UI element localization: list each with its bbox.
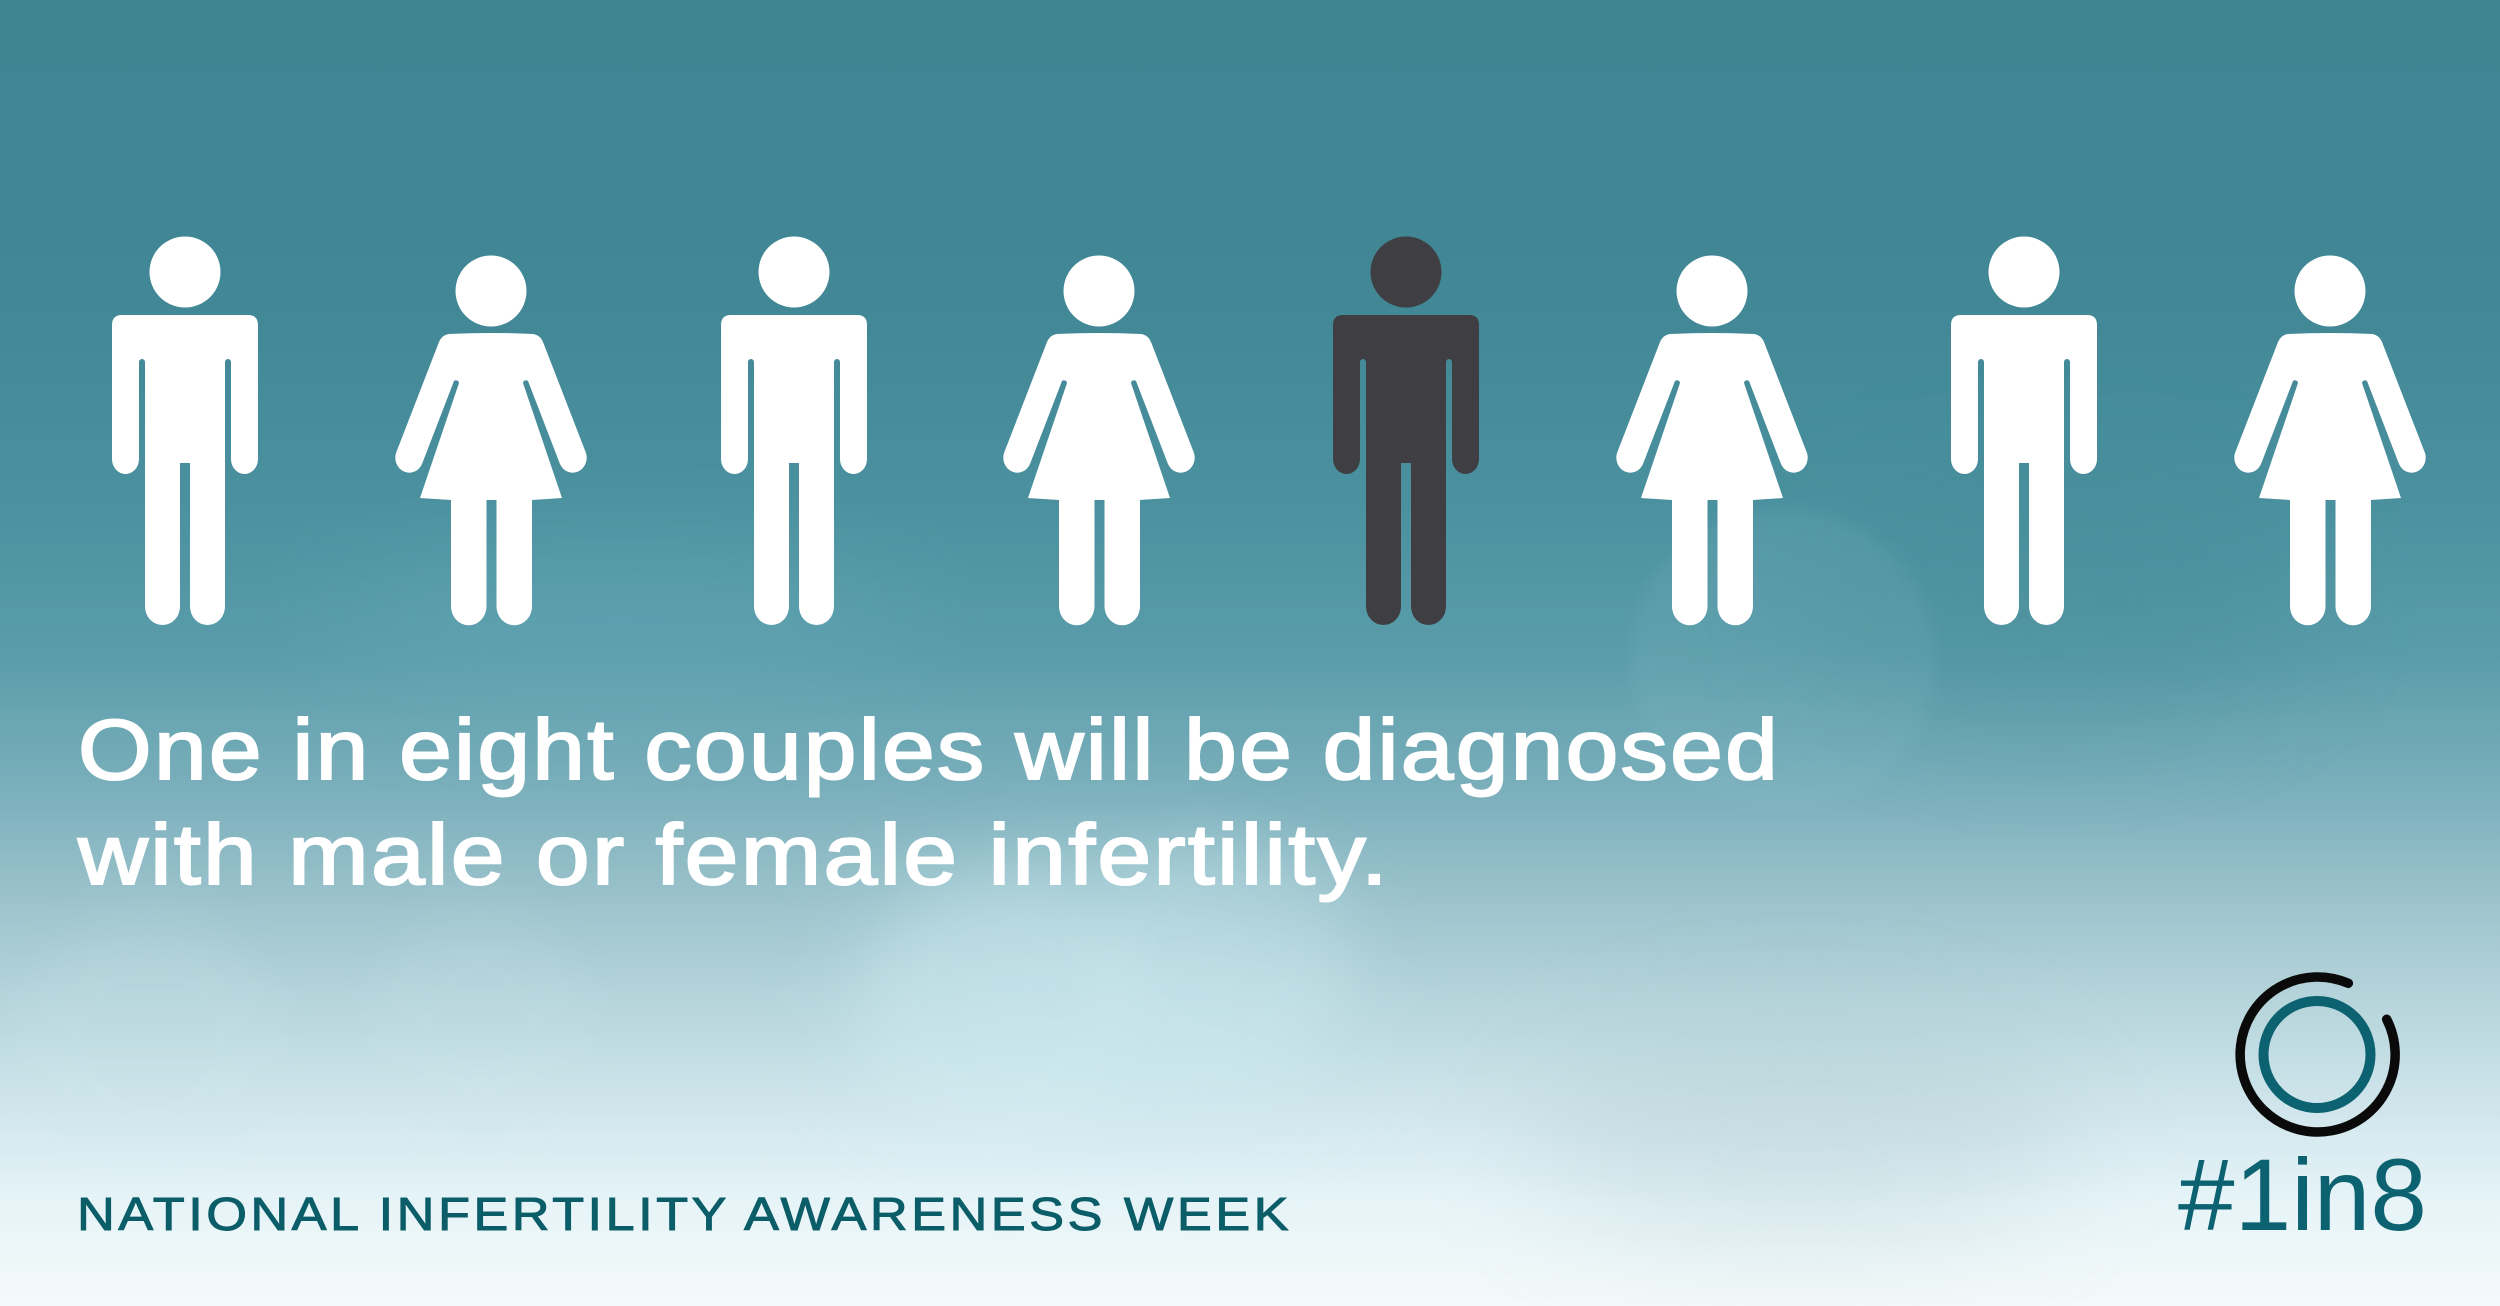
headline — [77, 703, 1780, 903]
icon: man 4 — [1951, 236, 2097, 625]
person row — [112, 236, 2426, 625]
icon: man 2 — [721, 236, 867, 625]
icon: woman 3 — [1616, 256, 1808, 625]
headline: One in eight couples will be diagnosed — [78, 703, 1780, 798]
logo: concentric rings — [2240, 977, 2395, 1132]
icon: woman 2 — [1003, 256, 1195, 625]
footer label: NATIONAL INFERTILITY AWARENESS WEEK — [77, 1188, 1292, 1240]
hashtag: #1in8 — [2178, 1138, 2427, 1252]
background bokeh glow — [20, 480, 2310, 1240]
icon: man 1 — [112, 236, 258, 625]
headline: with male or female infertility. — [77, 808, 1390, 903]
icon: woman 1 — [395, 256, 587, 625]
icon: man 3, highlighted dark — [1333, 236, 1479, 625]
icon: woman 4 — [2234, 256, 2426, 625]
